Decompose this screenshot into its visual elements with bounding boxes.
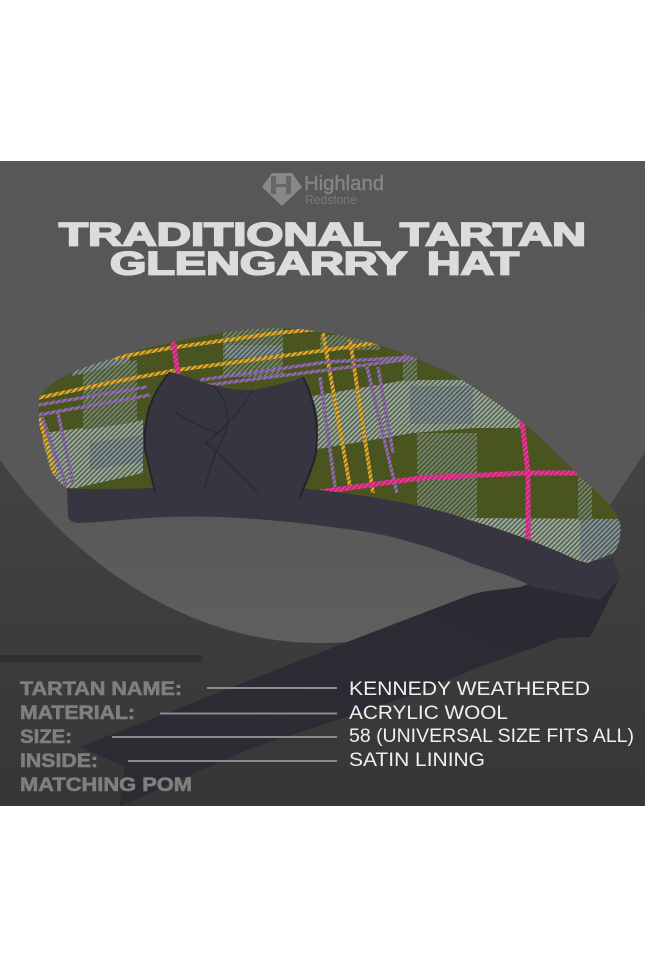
row: inside: SATIN LINING bbox=[349, 750, 485, 771]
title line 2: HAT bbox=[427, 245, 520, 281]
bow bbox=[143, 372, 318, 498]
bow folds bbox=[175, 385, 258, 492]
purple stripes bbox=[38, 357, 417, 493]
title line 1: TRADITIONAL bbox=[59, 216, 381, 252]
icon: diamond logo mark bbox=[262, 173, 302, 206]
logo bbox=[262, 173, 384, 207]
row: inside: INSIDE: bbox=[20, 751, 98, 772]
row: matching pom: MATCHING POM bbox=[20, 775, 192, 796]
hat band bbox=[67, 485, 620, 600]
panel: light rounded backdrop bbox=[0, 161, 645, 643]
row: tartan name bbox=[20, 679, 590, 700]
row: size: 58 (UNIVERSAL SIZE FITS ALL) bbox=[349, 726, 634, 747]
row: size: SIZE: bbox=[20, 727, 72, 748]
row: tartan name: TARTAN NAME: bbox=[20, 679, 182, 700]
row: tartan name: KENNEDY WEATHERED bbox=[349, 679, 590, 700]
infographic bbox=[0, 161, 645, 806]
title line 2: GLENGARRY bbox=[110, 245, 407, 281]
decorative bar bbox=[0, 655, 202, 662]
panel: dark background bbox=[0, 161, 645, 806]
pink stripes bbox=[173, 340, 582, 545]
title bbox=[59, 216, 586, 281]
ribbon tail bbox=[80, 558, 620, 806]
title line 1: TARTAN bbox=[400, 216, 586, 252]
spec list bbox=[20, 679, 634, 796]
yellow stripes bbox=[38, 329, 375, 493]
logo name: Highland bbox=[304, 173, 384, 195]
tartan crown bbox=[30, 320, 630, 570]
row: inside bbox=[20, 750, 485, 772]
row: size bbox=[20, 726, 634, 748]
bow outline bbox=[145, 372, 317, 498]
row: material: ACRYLIC WOOL bbox=[349, 703, 508, 724]
logo subname: Redstone bbox=[305, 193, 357, 207]
hat bbox=[30, 320, 630, 600]
row: material bbox=[20, 703, 508, 724]
pale checks bbox=[40, 325, 625, 570]
row: material: MATERIAL: bbox=[20, 703, 135, 724]
